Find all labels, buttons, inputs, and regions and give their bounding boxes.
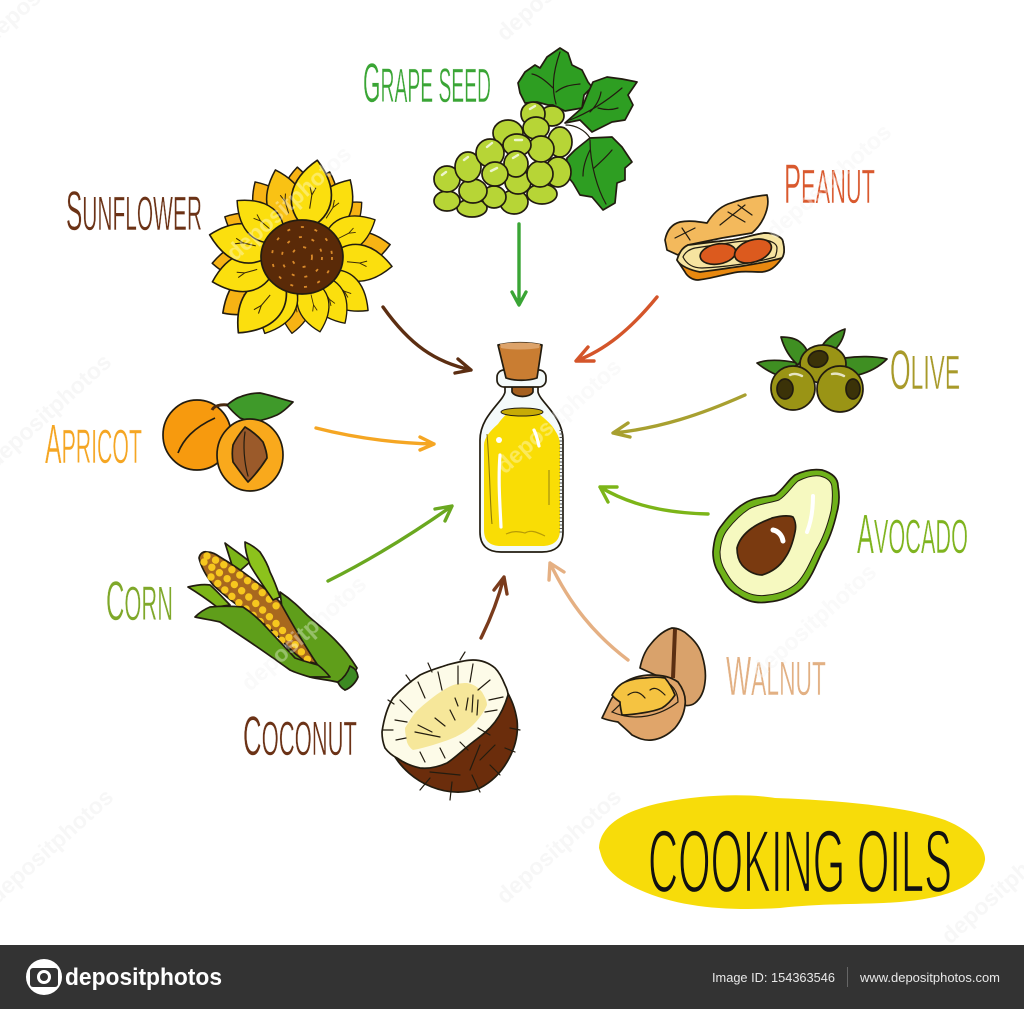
label: coconut: COCONUT (243, 704, 357, 767)
watermark: depositphotos (491, 783, 626, 909)
watermark: depositphotos (236, 570, 371, 696)
watermark: depositphotos (221, 140, 356, 266)
icon: olives (757, 329, 887, 412)
infographic: cooking oils: GRAPE SEED (363, 51, 491, 114)
footer bar (0, 945, 1024, 1009)
icon: oil bottle (480, 342, 563, 552)
footer bar: depositphotos (65, 964, 222, 991)
arrow: corn (328, 506, 452, 581)
watermark overlay on artwork (221, 118, 896, 696)
infographic: cooking oils: SUNFLOWER (66, 179, 202, 242)
arrow: olive (613, 395, 745, 437)
footer bar: www.depositphotos.com (859, 970, 1000, 985)
watermark overlay on artwork: depositphotos (746, 558, 881, 684)
icon: apricot (163, 393, 293, 491)
icon: avocado (713, 470, 839, 603)
watermark: depositphotos (761, 118, 896, 244)
icon: grape bunch (434, 48, 637, 217)
footer bar: Image ID: 154363546 (712, 970, 835, 985)
arrow: sunflower (383, 307, 471, 373)
arrow: grape seed (512, 224, 526, 305)
footer logo (26, 959, 62, 995)
label: walnut: WALNUT (726, 644, 826, 707)
watermark overlay on artwork: depositphotos (491, 353, 626, 479)
arrow: apricot (316, 428, 434, 450)
arrow: avocado (600, 487, 708, 514)
arrow: peanut (576, 297, 657, 361)
icon: peanut (665, 195, 784, 280)
label: corn: CORN (106, 569, 173, 632)
watermark: depositphotos (491, 353, 626, 479)
icon: corn (188, 542, 358, 690)
arrow: walnut (549, 563, 628, 660)
icon: coconut (382, 652, 520, 800)
watermark overlay on artwork: depositphotos (761, 118, 896, 244)
arrow: coconut (481, 577, 507, 638)
icon: sunflower (205, 157, 394, 346)
watermark: depositphotos (746, 558, 881, 684)
watermark overlay on artwork: depositphotos (236, 570, 371, 696)
watermark overlay on artwork: depositphotos (221, 140, 356, 266)
label: peanut: PEANUT (784, 152, 875, 215)
icon: walnut (602, 628, 705, 740)
title blob: cooking oils (599, 795, 985, 911)
label: olive: OLIVE (890, 338, 960, 401)
infographic: cooking oils: APRICOT (45, 412, 142, 475)
